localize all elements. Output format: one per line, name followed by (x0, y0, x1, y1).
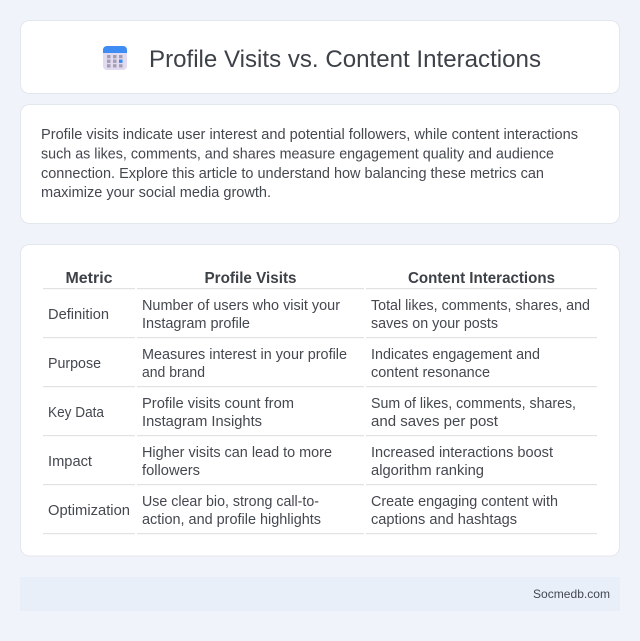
intro paragraph: such as likes, comments, and shares measure engagement quality and audience (41, 146, 554, 162)
footer credit: Socmedb.com (533, 587, 610, 601)
intro paragraph: maximize your social media growth. (41, 185, 271, 201)
intro paragraph: connection. Explore this article to understand how balancing these metrics can (41, 166, 544, 182)
row: definition (48, 298, 590, 332)
panel: comparison table (20, 244, 620, 556)
row: impact (48, 445, 553, 479)
row: purpose: content resonance (371, 365, 490, 381)
row: definition: Number of users who visit your (142, 298, 340, 314)
row: definition: Instagram profile (142, 316, 250, 332)
row: purpose: Measures interest in your profile (142, 347, 347, 363)
row: impact: Higher visits can lead to more (142, 445, 332, 461)
panel: title (20, 20, 620, 94)
icon: calendar (103, 46, 127, 70)
row: key data (48, 396, 576, 430)
table header: Metric (66, 270, 113, 287)
row: purpose: Indicates engagement and (371, 347, 540, 363)
row: impact: followers (142, 463, 200, 479)
row: purpose: and brand (142, 365, 205, 381)
intro paragraph: Profile visits indicate user interest and potential followers, while content interactions (41, 127, 578, 143)
title text: Profile Visits vs. Content Interactions (149, 46, 541, 73)
row: purpose: Purpose (48, 356, 101, 372)
row: optimization: Create engaging content with (371, 494, 558, 510)
intro paragraph (41, 127, 578, 201)
row: key data: Sum of likes, comments, shares, (371, 396, 576, 412)
table header: Content Interactions (408, 270, 555, 287)
row: optimization: Use clear bio, strong call-to- (142, 494, 319, 510)
row: definition: saves on your posts (371, 316, 498, 332)
row: impact: Impact (48, 454, 92, 470)
table rules (43, 288, 597, 534)
row: key data: Profile visits count from (142, 396, 294, 412)
row: purpose (48, 347, 540, 381)
row: impact: algorithm ranking (371, 463, 484, 479)
row: key data: Key Data (48, 405, 104, 421)
table header: Profile Visits (204, 270, 297, 287)
footer (20, 577, 620, 611)
row: impact: Increased interactions boost (371, 445, 553, 461)
row: definition: Total likes, comments, shares, and (371, 298, 590, 314)
row: optimization: Optimization (48, 503, 130, 519)
row: optimization (48, 494, 558, 528)
row: key data: and saves per post (371, 414, 498, 430)
row: optimization: action, and profile highlights (142, 512, 321, 528)
row: key data: Instagram Insights (142, 414, 262, 430)
panel: introduction (20, 104, 620, 224)
table header (66, 270, 555, 287)
row: optimization: captions and hashtags (371, 512, 517, 528)
row: definition: Definition (48, 307, 109, 323)
